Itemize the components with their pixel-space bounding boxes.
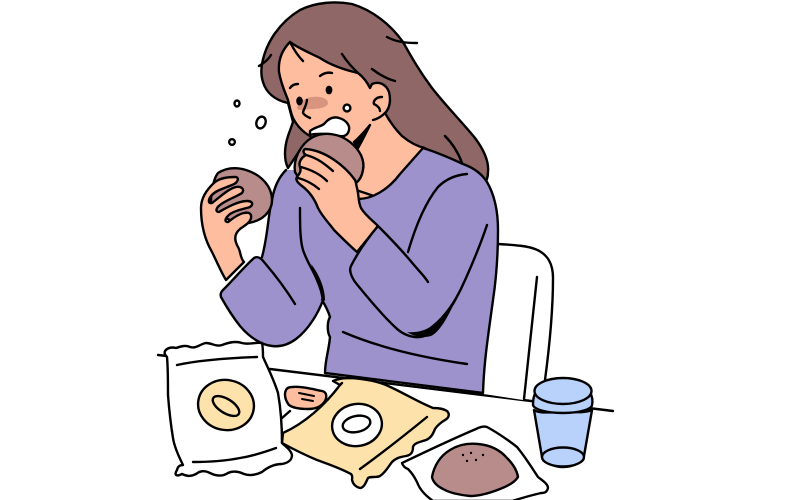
table edge xyxy=(158,355,613,411)
sweater xyxy=(255,148,498,393)
right bun xyxy=(295,134,363,183)
chair xyxy=(484,244,553,400)
cup xyxy=(533,378,592,467)
left sleeve xyxy=(221,257,323,346)
mouth with food xyxy=(310,117,370,148)
right hand xyxy=(296,149,378,252)
blush xyxy=(297,97,328,110)
hair xyxy=(259,2,488,184)
white snack bag xyxy=(165,342,292,476)
crumbs xyxy=(229,100,267,145)
wrapped bun on paper xyxy=(402,427,548,500)
left bun xyxy=(211,168,272,223)
skin: face and neck xyxy=(279,42,425,205)
right sleeve xyxy=(350,225,487,337)
snack piece xyxy=(285,387,326,409)
left hand xyxy=(201,177,252,280)
ear detail xyxy=(373,97,385,120)
face details xyxy=(290,73,350,118)
yellow snack bag xyxy=(282,378,449,488)
